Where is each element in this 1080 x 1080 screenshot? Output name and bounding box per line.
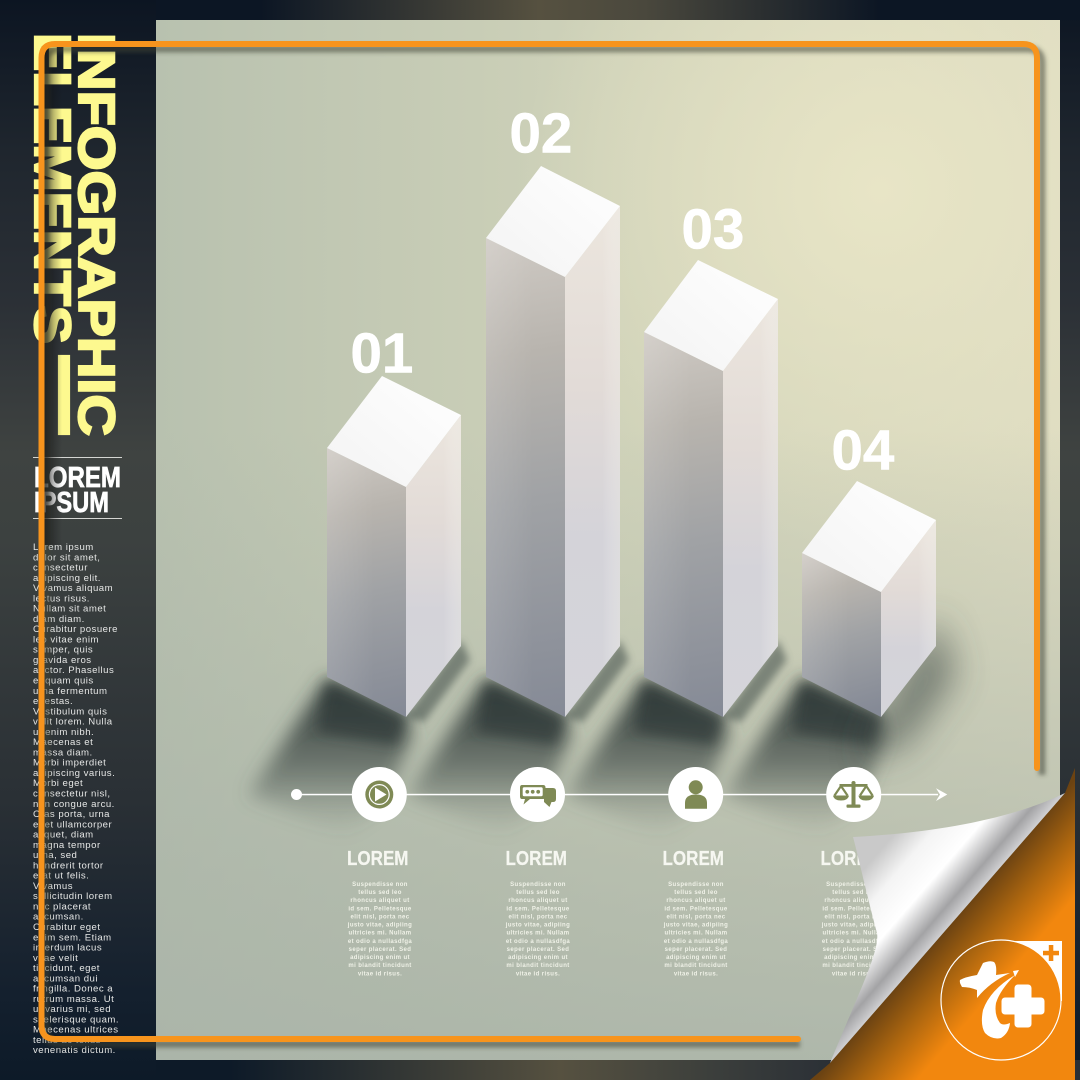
bar 1 (327, 376, 461, 717)
column 4 text: tellus sed leo (832, 890, 876, 896)
column 1 text: vitae id risus. (358, 971, 402, 977)
sidebar body text: ut varius mi, sed (33, 1004, 111, 1015)
column 3 text: tellus sed leo (674, 890, 718, 896)
column 2 text: ultricies mi. Nullam (506, 931, 570, 937)
column 2 text: tellus sed leo (516, 890, 560, 896)
number 03: 03 (682, 198, 744, 260)
sidebar body text: tellus ac tellus (33, 1035, 101, 1046)
sidebar body text: et quam quis (33, 676, 94, 687)
column 1 text: rhoncus aliquet ut (350, 898, 410, 904)
column 1 text: adipiscing enim ut (350, 955, 410, 961)
logo (941, 940, 1062, 1060)
sidebar body text: tincidunt, eget (33, 963, 100, 974)
sidebar body text: hendrerit tortor (33, 860, 104, 871)
column 3 text: elit nisl, porta nec (666, 914, 726, 920)
column 3 text: ultricies mi. Nullam (664, 931, 728, 937)
column 1 text: mi blandit tincidunt (348, 963, 412, 969)
sidebar body text: magna tempor (33, 840, 101, 851)
vertical title: INFOGRAPHIC (68, 33, 125, 436)
number 02: 02 (510, 102, 572, 164)
sidebar body text: gravida eros (33, 655, 92, 666)
number 04: 04 (832, 418, 895, 482)
column 4 text: id sem. Pelletesque (822, 906, 886, 912)
sidebar body text: Nullam sit amet (33, 604, 106, 615)
column 2 text: id sem. Pelletesque (506, 906, 570, 912)
column 3 text: vitae id risus. (674, 971, 718, 977)
sidebar body text: erat ut felis. (33, 871, 89, 882)
sidebar body text: Morbi imperdiet (33, 758, 106, 769)
column 3 heading: LOREM (662, 847, 724, 870)
column 3 text: seper placerat. Sed (665, 947, 727, 953)
column 4 text: vitae id risus. (832, 971, 876, 977)
sidebar body text: adipiscing elit. (33, 573, 101, 584)
sidebar body text: sollicitudin lorem (33, 891, 113, 902)
column 4 text: seper placerat. Sed (823, 947, 885, 953)
sidebar body text: accumsan. (33, 912, 84, 923)
column 2 text: mi blandit tincidunt (506, 963, 570, 969)
column 4 text: justo vitae, adipiing (821, 923, 886, 929)
subtitle: lorem ipsum: IPSUM (34, 487, 109, 519)
sidebar body text: lectus risus. (33, 593, 90, 604)
sidebar body text: enim sem. Etiam (33, 932, 112, 943)
column 1 text: elit nisl, porta nec (350, 914, 410, 920)
sidebar body text: Curabitur eget (33, 922, 101, 933)
column 1 text: justo vitae, adipiing (347, 923, 412, 929)
subtitle: lorem ipsum: LOREM (34, 462, 121, 494)
column 4 heading: LOREM (820, 847, 882, 870)
sidebar body text: Maecenas et (33, 737, 93, 748)
column 1 text: Suspendisse non (352, 882, 408, 888)
sidebar body text: consectetur nisl, (33, 788, 110, 799)
sidebar body text: scelerisque quam. (33, 1014, 119, 1025)
cast shadows of the bars (248, 615, 955, 835)
column 4 text: adipiscing enim ut (824, 955, 884, 961)
sidebar body text: fringilla. Donec a (33, 984, 113, 995)
column 1 text: ultricies mi. Nullam (348, 931, 412, 937)
sidebar body text: interdum lacus (33, 943, 102, 954)
column 2 heading: LOREM (506, 847, 567, 870)
sidebar body text: leo vitae enim (33, 634, 99, 645)
icon: play (352, 767, 407, 822)
column 2 text: rhoncus aliquet ut (508, 898, 568, 904)
column 3 text: id sem. Pelletesque (664, 906, 728, 912)
sidebar body text: venenatis dictum. (33, 1045, 116, 1056)
sidebar body text: eget ullamcorper (33, 819, 112, 830)
sidebar body text: Cras porta, urna (33, 809, 110, 820)
column 4 text: ultricies mi. Nullam (822, 931, 886, 937)
bar 3 (644, 260, 778, 717)
sidebar body text: egestas. (33, 696, 73, 707)
sidebar body text: non congue arcu. (33, 799, 115, 810)
column 1 heading: LOREM (347, 847, 408, 870)
column 4 text: rhoncus aliquet ut (824, 898, 884, 904)
icon: person (668, 767, 723, 822)
sidebar body text: urna fermentum (33, 686, 107, 697)
sidebar body text: accumsan dui (33, 973, 98, 984)
column 3 text: Suspendisse non (668, 882, 724, 888)
sidebar body text: urna, sed (33, 850, 77, 861)
sidebar body text: Morbi eget (33, 778, 83, 789)
column 2 text: elit nisl, porta nec (508, 914, 568, 920)
column 4 text: et odio a nullasdfga (822, 939, 886, 945)
bar 2 (486, 166, 620, 717)
vertical title (24, 33, 125, 436)
column 4 text: mi blandit tincidunt (822, 963, 886, 969)
column 3 text: adipiscing enim ut (666, 955, 726, 961)
timeline arrow (291, 788, 947, 801)
icon: chat bubbles (510, 767, 565, 822)
column 1 text: et odio a nullasdfga (348, 939, 412, 945)
column 3 text: et odio a nullasdfga (664, 939, 728, 945)
sidebar body text: diam diam. (33, 614, 85, 625)
sidebar body text: ut enim nibh. (33, 727, 94, 738)
subtitle: lorem ipsum (33, 457, 122, 519)
column 2 text: Suspendisse non (510, 882, 566, 888)
sidebar body text: Maecenas ultrices (33, 1025, 118, 1036)
column 1 text: seper placerat. Sed (349, 947, 411, 953)
sidebar body text: nec placerat (33, 901, 91, 912)
sidebar body text: dolor sit amet, (33, 552, 100, 563)
sidebar body text: massa diam. (33, 747, 93, 758)
sidebar body text: Vivamus (33, 881, 73, 892)
column 3 text: rhoncus aliquet ut (666, 898, 726, 904)
icon: scales (826, 767, 881, 822)
column 1 text: tellus sed leo (358, 890, 402, 896)
sidebar body text: consectetur (33, 563, 88, 574)
column 1 text: id sem. Pelletesque (348, 906, 412, 912)
sidebar body text: Vivamus aliquam (33, 583, 113, 594)
sidebar body text: velit lorem. Nulla (33, 717, 113, 728)
sidebar body text: rutrum massa. Ut (33, 994, 114, 1005)
column 3 text: mi blandit tincidunt (664, 963, 728, 969)
sidebar body text: adipiscing varius. (33, 768, 115, 779)
sidebar body text: Lorem ipsum (33, 542, 94, 553)
bar 4 (802, 481, 936, 717)
column 2 text: justo vitae, adipiing (505, 923, 570, 929)
sidebar body text: Vestibulum quis (33, 706, 107, 717)
column 4 text: elit nisl, porta nec (824, 914, 884, 920)
sidebar body text: aliquet, diam (33, 830, 94, 841)
column 2 text: adipiscing enim ut (508, 955, 568, 961)
sidebar body text: semper, quis (33, 645, 93, 656)
sidebar body text: Curabitur posuere (33, 624, 118, 635)
column 3 text: justo vitae, adipiing (663, 923, 728, 929)
vertical title: ELEMENTS (24, 33, 81, 344)
column 2 text: et odio a nullasdfga (506, 939, 570, 945)
column 2 text: seper placerat. Sed (507, 947, 569, 953)
column 2 text: vitae id risus. (516, 971, 560, 977)
sidebar body text: vitae velit (33, 953, 78, 964)
sidebar body text: auctor. Phasellus (33, 665, 114, 676)
column 4 text: Suspendisse non (826, 882, 882, 888)
number 01: 01 (350, 322, 413, 384)
page curl (830, 793, 1065, 1063)
orange page corner (810, 768, 1075, 1080)
